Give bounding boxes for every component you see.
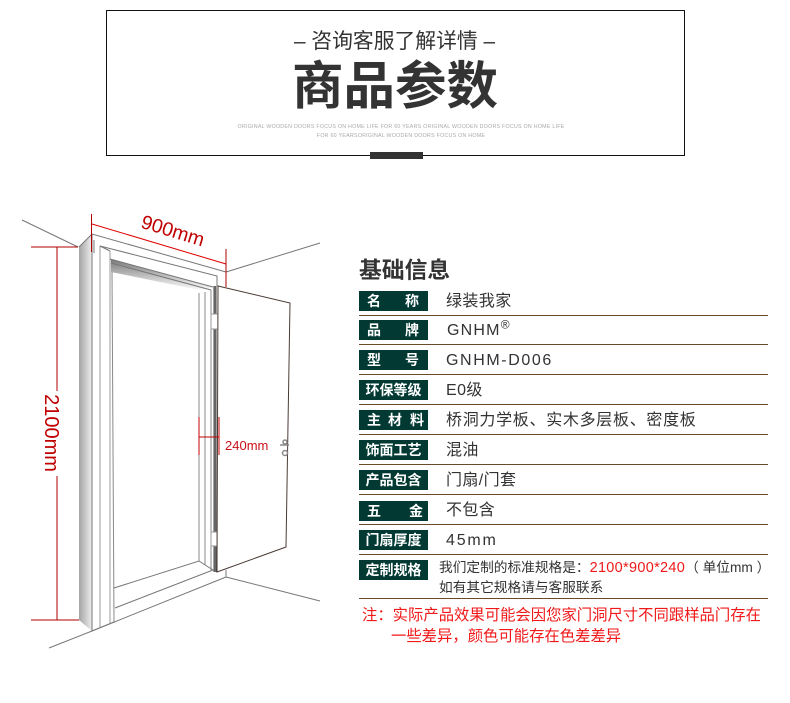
value: GNHM® xyxy=(447,318,511,339)
spec row: brand xyxy=(359,318,511,340)
room wall and floor lines xyxy=(22,220,320,648)
open door leaf xyxy=(217,286,290,572)
value: 45mm xyxy=(446,532,498,549)
dimension: height 2100mm: 2100mm xyxy=(40,394,62,472)
header panel xyxy=(106,10,685,156)
label: 料 xyxy=(410,412,424,428)
spec row: model xyxy=(359,350,553,370)
note xyxy=(362,606,761,645)
label: 名 xyxy=(367,293,381,309)
label: 产品包含 xyxy=(366,472,422,488)
label: 型 xyxy=(367,352,381,368)
label: 称 xyxy=(405,293,419,309)
dimension: width 900mm xyxy=(92,211,226,287)
label: 饰面工艺 xyxy=(366,442,422,458)
label: 金 xyxy=(409,503,423,519)
label: 定制规格 xyxy=(366,562,422,578)
label xyxy=(359,530,428,550)
english tagline: ORIGINAL WOODEN DOORS FOCUS ON HOME LIFE FOR 60 YEARS ORIGINAL WOODEN DOORS FOCUS ON HOME LIFE xyxy=(237,124,565,130)
value xyxy=(439,560,770,595)
label: 主 xyxy=(367,412,381,428)
spec row: thickness xyxy=(359,530,498,550)
english tagline: FOR 60 YEARSORIGINAL WOODEN DOORS FOCUS ON HOME xyxy=(317,132,485,138)
english tagline xyxy=(237,124,565,138)
note: 注：实际产品效果可能会因您家门洞尺寸不同跟样品门存在 xyxy=(362,607,761,624)
header accent bar xyxy=(370,152,423,159)
spec row: grade xyxy=(359,380,483,400)
label: 号 xyxy=(405,352,419,368)
title: 商品参数 xyxy=(292,57,498,115)
label xyxy=(359,440,428,460)
subtitle: – 咨询客服了解详情 – xyxy=(294,30,495,53)
spec row: included xyxy=(359,470,516,490)
label xyxy=(359,350,428,370)
label xyxy=(359,501,428,521)
label: 环保等级 xyxy=(366,382,422,398)
value: 绿装我家 xyxy=(446,293,512,310)
value: 门扇/门套 xyxy=(446,472,516,489)
value: 我们定制的标准规格是：2100*900*240（ 单位mm ） xyxy=(439,560,770,576)
note: 一些差异，颜色可能存在色差差异 xyxy=(391,628,621,645)
hinges xyxy=(211,314,218,546)
dimension: depth 240mm: 240mm xyxy=(225,438,268,453)
label: 牌 xyxy=(405,322,419,338)
label: 门扇厚度 xyxy=(366,532,422,548)
door diagram xyxy=(22,211,320,648)
section heading: 基础信息 xyxy=(359,257,450,283)
label: 五 xyxy=(367,503,381,519)
label xyxy=(359,320,428,340)
label: 品 xyxy=(367,322,381,338)
label xyxy=(359,470,428,490)
label xyxy=(359,410,428,430)
label xyxy=(359,380,428,400)
dimension: height 2100mm xyxy=(31,247,79,620)
value: E0级 xyxy=(446,382,483,399)
spec row: custom size xyxy=(359,560,770,595)
value: 混油 xyxy=(446,442,479,459)
value: 桥洞力学板、实木多层板、密度板 xyxy=(446,412,697,429)
spec row: material xyxy=(359,410,697,430)
spec row: name xyxy=(359,291,512,311)
label xyxy=(359,291,428,311)
dimension: depth 240mm xyxy=(199,417,268,455)
value: GNHM-D006 xyxy=(446,352,553,369)
spec row: hardware xyxy=(359,501,495,521)
door frame xyxy=(79,234,226,631)
value: 如有其它规格请与客服联系 xyxy=(439,580,603,595)
label xyxy=(359,560,428,580)
door handle xyxy=(280,440,289,456)
label: 材 xyxy=(388,412,402,428)
dimension: width 900mm: 900mm xyxy=(138,211,207,251)
spec row: finish xyxy=(359,440,479,460)
value: 不包含 xyxy=(446,502,495,519)
